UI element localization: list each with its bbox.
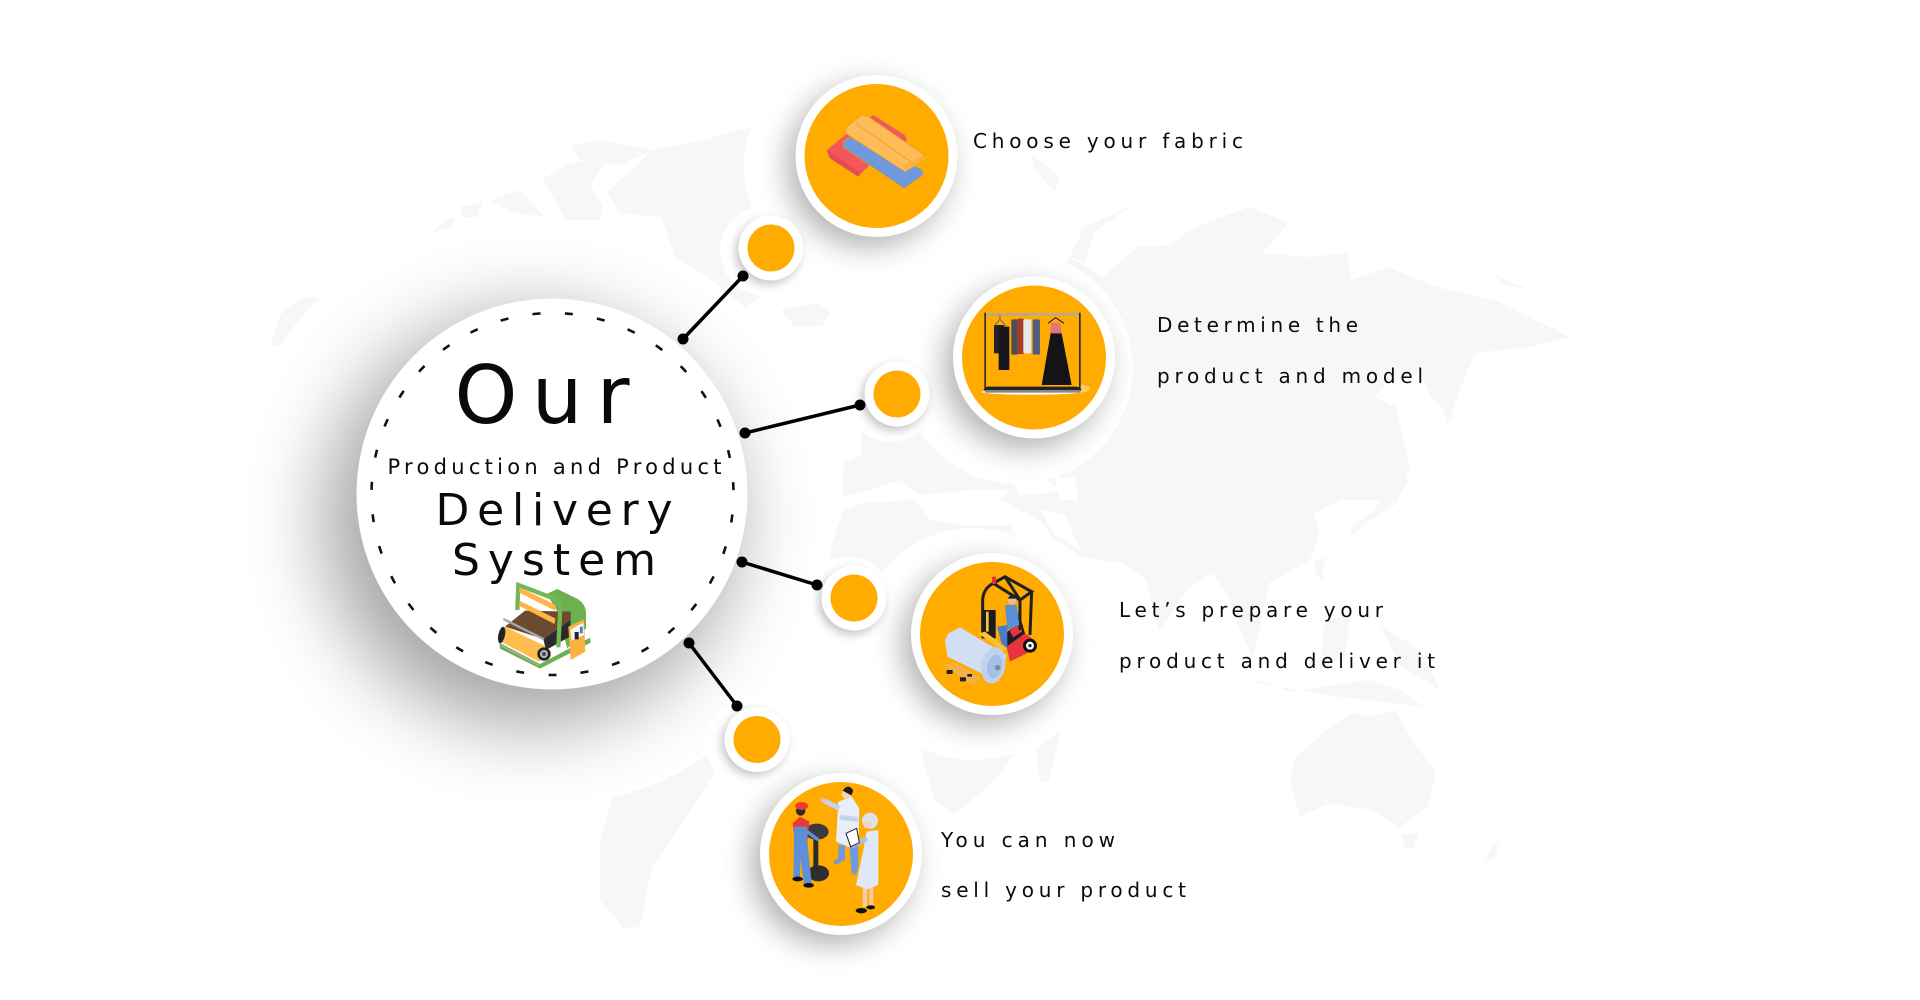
connector: main circle to step 4 (684, 638, 742, 712)
connector: main circle to step 3 (736, 556, 822, 590)
title: Our: Our (454, 349, 630, 442)
label: step 2: Determine the (1157, 313, 1358, 337)
label: step 4 (940, 828, 1186, 902)
title: Production and Product: Production and Product (388, 455, 722, 479)
label: step 2 (1157, 313, 1423, 388)
label: step 2: product and model (1157, 364, 1423, 388)
label: step 1: Choose your fabric (973, 129, 1243, 153)
halos around step circles (706, 51, 1133, 980)
label: step 3: Let’s prepare your (1119, 598, 1384, 622)
main circle halo and shadow (253, 226, 833, 806)
icon: three people at a table (792, 787, 878, 913)
step 4 large circle (751, 773, 922, 945)
main circle (356, 298, 748, 690)
label: step 3: product and deliver it (1119, 649, 1435, 673)
title: System: System (452, 535, 656, 586)
world map background (270, 128, 1570, 928)
step 1 large circle (787, 75, 958, 247)
label: step 3 (1119, 598, 1435, 673)
step 4 small node (722, 707, 790, 775)
step 1 small node (736, 216, 804, 284)
icon: clothes rack (982, 313, 1090, 395)
step 2 large circle (944, 276, 1115, 449)
step 2 small node (862, 362, 930, 430)
icon: forklift with roll (943, 577, 1037, 686)
title: Delivery: Delivery (436, 485, 672, 536)
connector: main circle to step 1 (678, 270, 748, 344)
map seas (1010, 477, 1080, 550)
label: step 4: You can now (940, 828, 1115, 852)
connector: main circle to step 2 (740, 400, 866, 438)
step 3 small node (819, 566, 886, 634)
icon: fabric rolls (827, 115, 925, 188)
step 3 large circle (902, 553, 1073, 725)
icon: loom machine (497, 585, 591, 669)
label: step 4: sell your product (941, 878, 1186, 902)
